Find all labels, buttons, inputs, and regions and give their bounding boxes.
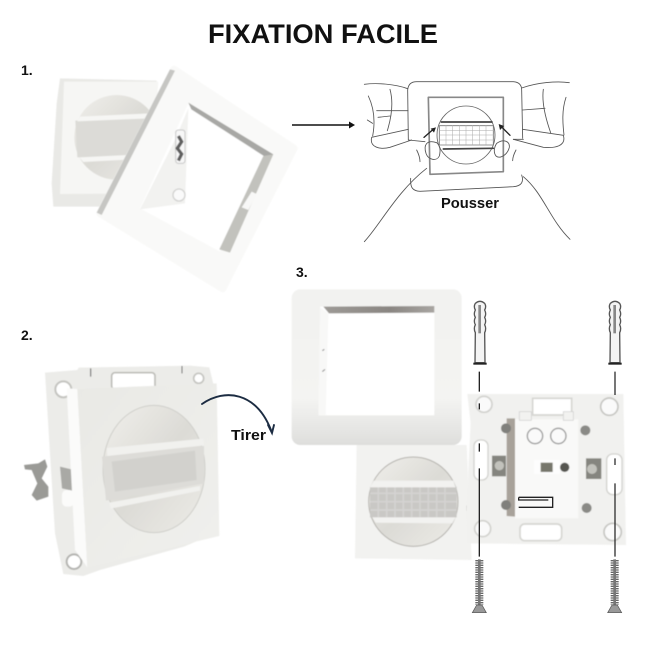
right guide lines — [613, 372, 617, 557]
frame — [292, 289, 462, 445]
curved arrow: pull — [202, 395, 274, 433]
outer frame outline — [408, 82, 523, 140]
lower frame edge — [411, 175, 523, 191]
left screw — [472, 559, 486, 613]
photo: mounting base with module — [466, 394, 626, 545]
left hand — [364, 84, 412, 148]
back plate — [45, 366, 215, 576]
sensor dome — [437, 106, 495, 164]
photo: sensor with tilted frame — [52, 69, 294, 289]
label: Pousser: Pousser — [441, 195, 499, 212]
sensor lens with grid — [439, 122, 493, 149]
arrow to drawing — [292, 122, 355, 128]
thumbs — [408, 140, 440, 162]
right wall plug — [608, 301, 622, 364]
photo: sensor cover being pulled — [24, 366, 219, 576]
metal claws — [24, 459, 48, 501]
module — [515, 419, 578, 518]
left guide lines — [477, 372, 481, 557]
sensor cover — [355, 445, 472, 560]
step number 2: 2. — [21, 327, 33, 343]
wrists — [364, 168, 570, 242]
inner frame — [428, 97, 503, 174]
label: Tirer: Tirer — [231, 427, 266, 444]
right hand — [513, 82, 569, 148]
step number 1: 1. — [21, 62, 33, 78]
right screw — [608, 559, 622, 613]
photo: frame and cover separated — [292, 289, 473, 560]
step number 3: 3. — [296, 264, 308, 280]
title: FIXATION FACILE — [208, 19, 438, 49]
base plate — [466, 394, 626, 545]
small push arrows — [424, 126, 510, 137]
front cover — [77, 383, 219, 567]
line drawing: pushing sensor with thumbs — [364, 82, 570, 242]
left wall plug — [473, 301, 487, 364]
